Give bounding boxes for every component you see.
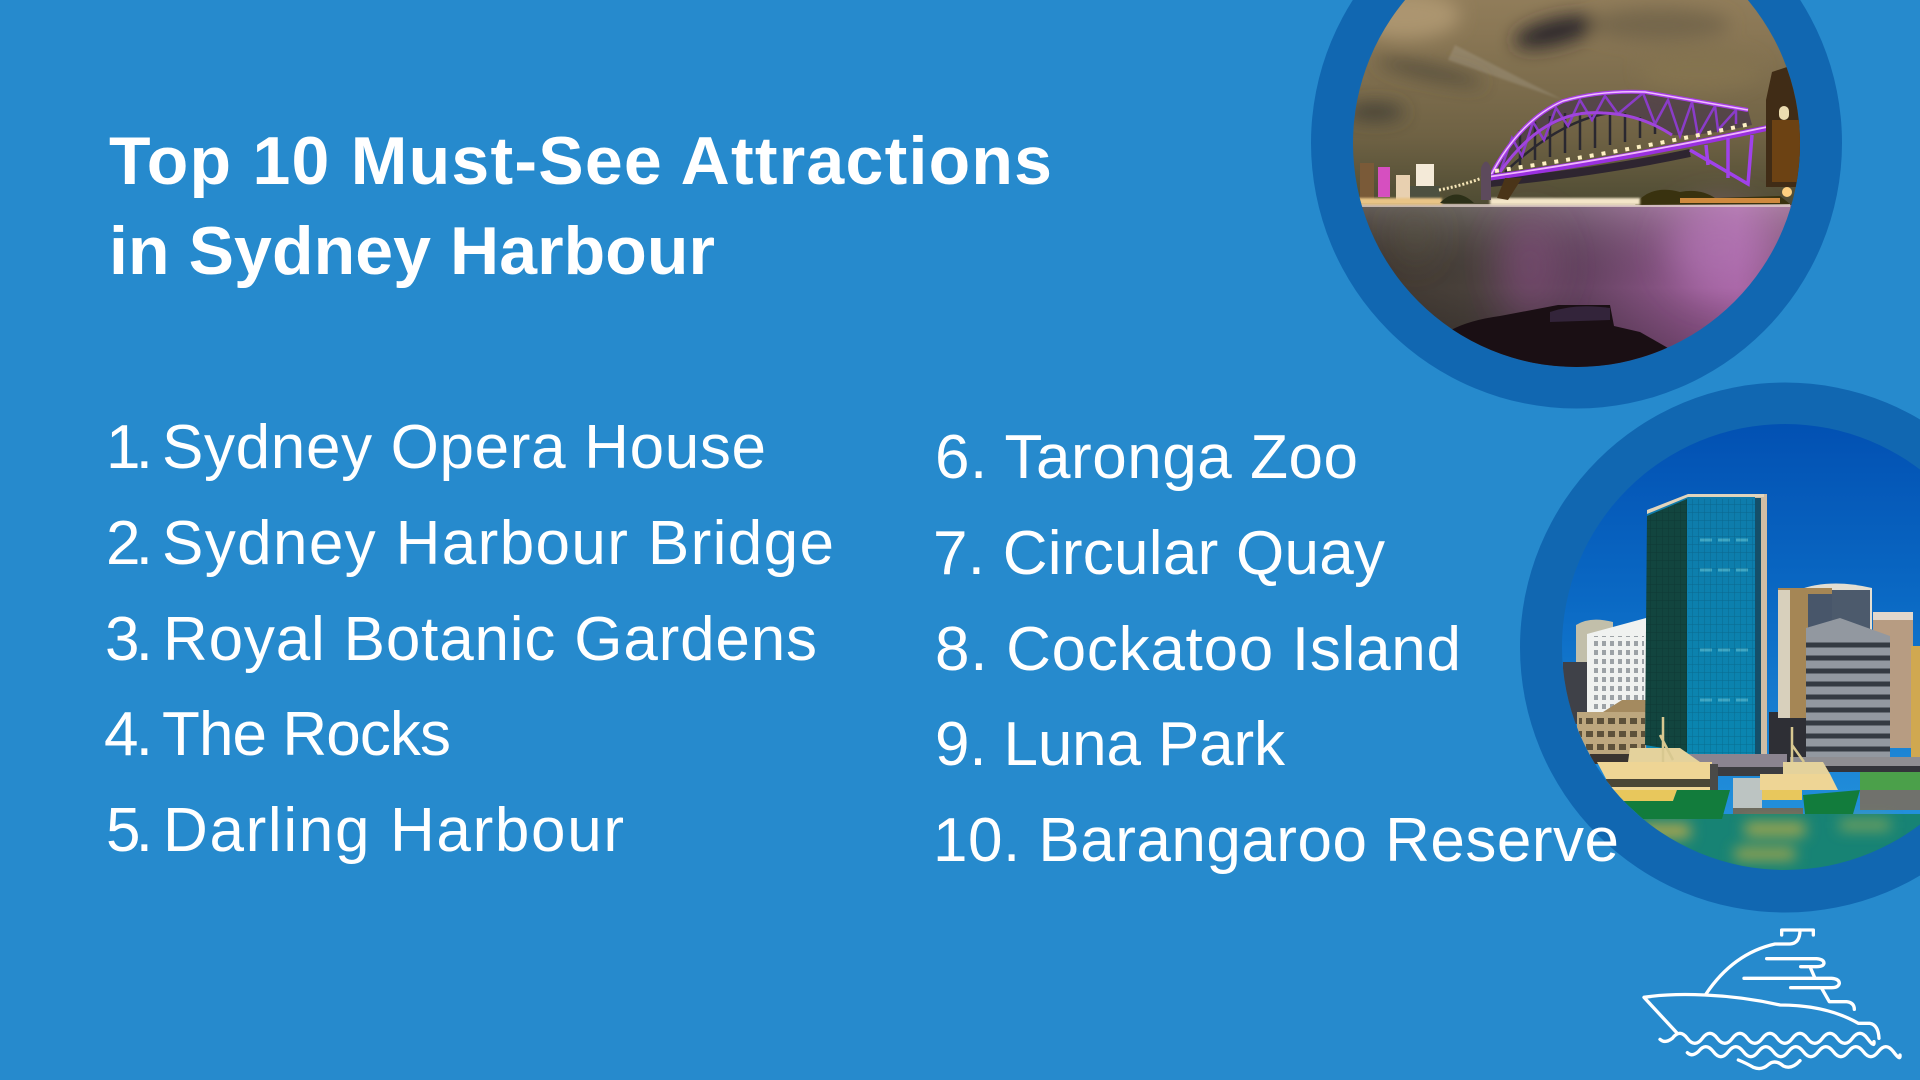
list: attractions 6 to 10: 7. Circular Quay (933, 519, 1385, 588)
list: attractions 1 to 5: 1. (106, 413, 153, 482)
water (1350, 205, 1805, 370)
bridge (1439, 92, 1767, 190)
list: attractions 1 to 5: 3. (105, 605, 153, 674)
distant trees and far shore (1440, 190, 1790, 205)
list: attractions 6 to 10: 9. Luna Park (935, 710, 1286, 779)
water (1638, 814, 1920, 870)
list: attractions 1 to 5: 2. (106, 509, 153, 578)
ferry right (1760, 727, 1860, 814)
list: attractions 1 to 5: Darling Harbour (163, 796, 624, 865)
city skyline (1354, 163, 1442, 205)
title: in Sydney Harbour (109, 213, 715, 289)
photo circle: Circular Quay skyline (1520, 382, 1920, 912)
icon: yacht on waves (1644, 930, 1900, 1069)
list: attractions 1 to 5: Sydney Harbour Bridge (162, 509, 834, 578)
pylon right (1766, 66, 1802, 197)
ferry left (1597, 717, 1730, 819)
right buildings (1769, 583, 1920, 766)
list: attractions 6 to 10: 10. Barangaroo Reserve (933, 806, 1619, 875)
searchlight beams (1448, 46, 1556, 97)
list: attractions 6 to 10 (933, 423, 1619, 875)
list: attractions 6 to 10: 6. Taronga Zoo (935, 423, 1358, 492)
title: Top 10 Must-See Attractions (109, 123, 1052, 199)
list: attractions 1 to 5: Royal Botanic Gardens (163, 605, 817, 674)
shore glow (1360, 204, 1790, 207)
list: attractions 1 to 5: 5. (106, 796, 153, 865)
photo circle: Sydney Harbour Bridge (1311, 0, 1842, 408)
list: attractions 6 to 10: 8. Cockatoo Island (935, 615, 1461, 684)
list: attractions 1 to 5: The Rocks (162, 700, 451, 769)
waterfront (1688, 754, 1787, 767)
left buildings (1563, 618, 1646, 757)
title (109, 123, 1052, 289)
list: attractions 1 to 5: Sydney Opera House (162, 413, 766, 482)
glass tower (1645, 494, 1767, 756)
list: attractions 1 to 5: 4. (104, 700, 153, 769)
bridge pylon left (1481, 162, 1491, 200)
list: attractions 1 to 5 (104, 413, 834, 865)
foreground rock (1452, 305, 1668, 367)
